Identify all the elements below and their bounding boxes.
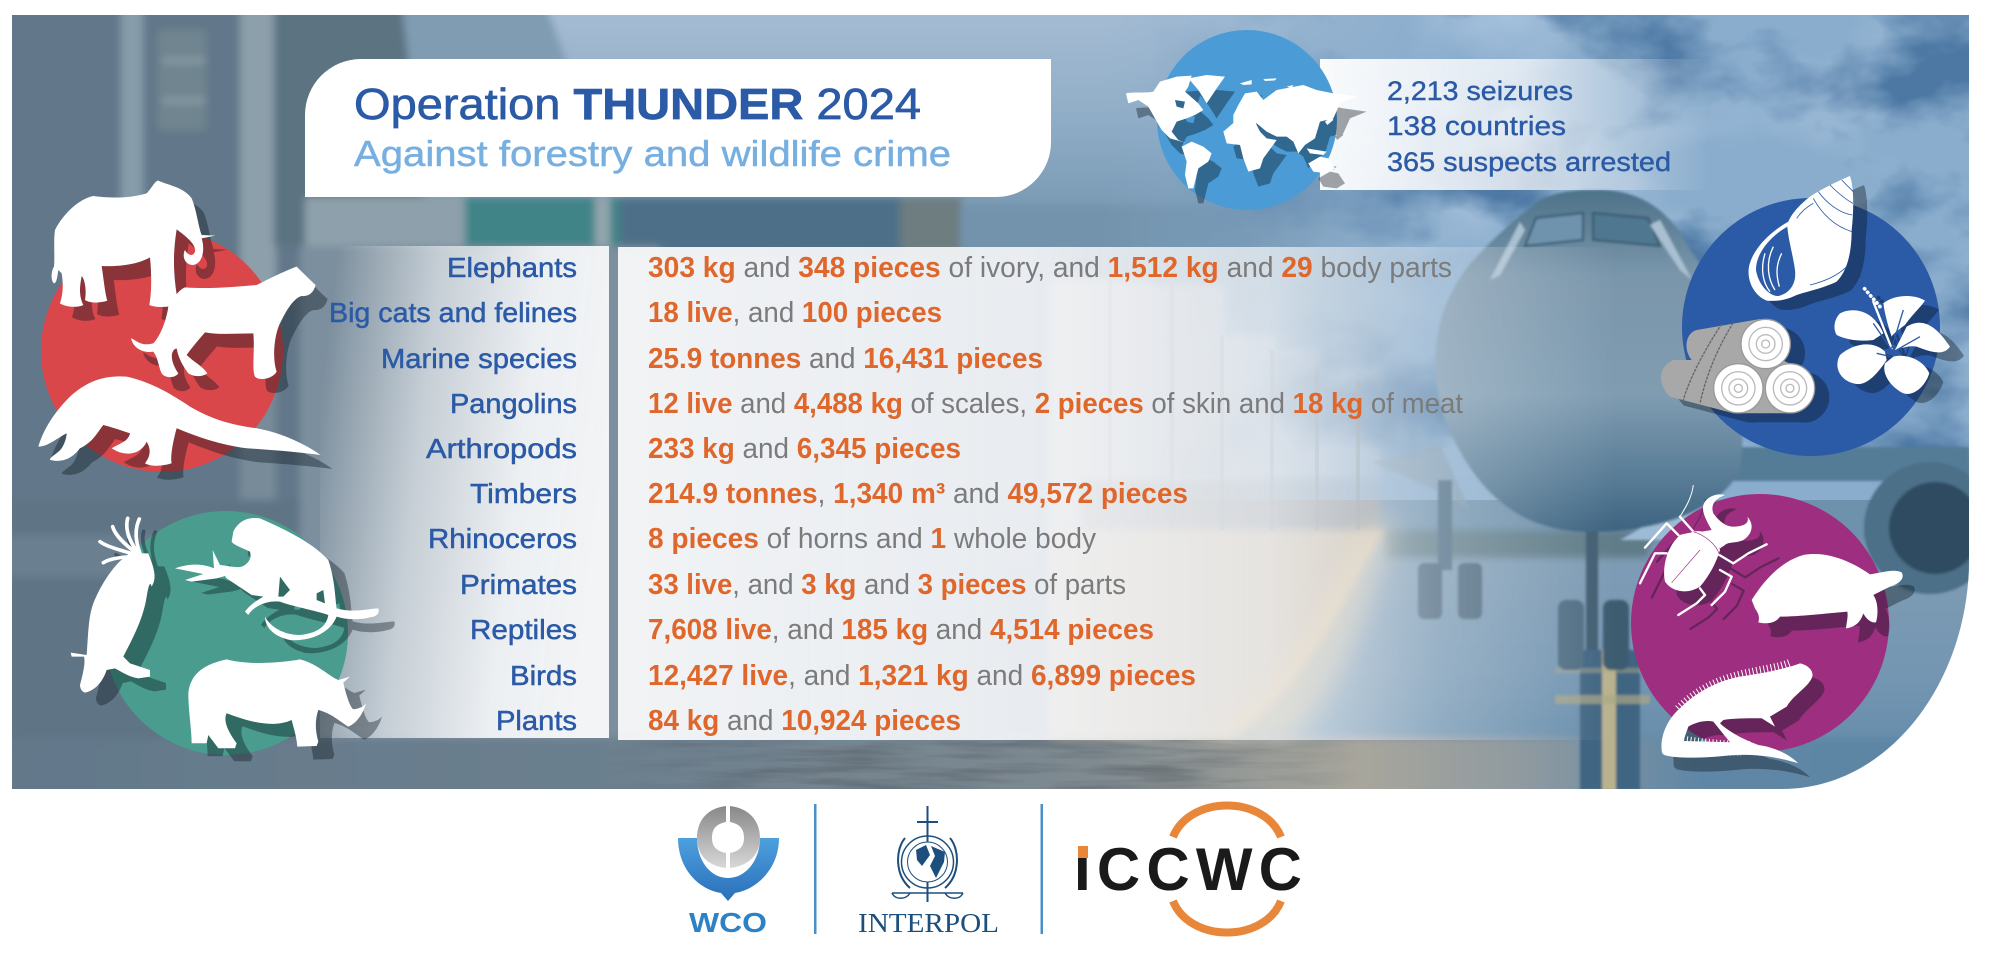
value: Primates: 33 live, and 3 kg and 3 pieces of parts bbox=[648, 569, 1126, 601]
value: Marine species: 25.9 tonnes and 16,431 pieces bbox=[648, 343, 1043, 375]
title heading: Operation THUNDER 2024 bbox=[354, 80, 921, 129]
red circle with elephant, big cat and pangolin bbox=[38, 181, 321, 472]
icon: turtle bbox=[1752, 554, 1903, 628]
subtitle: Against forestry and wildlife crime bbox=[354, 133, 951, 174]
icon: hibiscus flower bbox=[1834, 287, 1950, 394]
label: Arthropods: Arthropods bbox=[426, 433, 577, 464]
footer logos bbox=[678, 804, 1302, 938]
blue circle with shell, timber and plant bbox=[1661, 176, 1950, 456]
value: Plants: 84 kg and 10,924 pieces bbox=[648, 705, 961, 737]
logo: INTERPOL bbox=[858, 806, 999, 938]
icon: logs bbox=[1661, 319, 1815, 413]
value: Timbers: 214.9 tonnes, 1,340 m³ and 49,572 pieces bbox=[648, 478, 1188, 510]
countries stat: 138 countries bbox=[1387, 111, 1566, 141]
stats text bbox=[1387, 76, 1671, 177]
icon: beetle bbox=[1640, 485, 1767, 615]
logo: ICCWC bbox=[1074, 806, 1302, 932]
logo: INTERPOL: INTERPOL bbox=[858, 908, 999, 938]
value: Pangolins: 12 live and 4,488 kg of scales, 2 pieces of skin and 18 kg of meat bbox=[648, 388, 1463, 420]
label: Marine species: Marine species bbox=[381, 343, 577, 374]
value: Rhinoceros: 8 pieces of horns and 1 whole body bbox=[648, 523, 1096, 555]
logo: WCO bbox=[678, 806, 779, 938]
logo: ICCWC: ICCWC bbox=[1074, 836, 1302, 903]
value: Birds: 12,427 live, and 1,321 kg and 6,899 pieces bbox=[648, 660, 1196, 692]
icon: rhinoceros bbox=[188, 659, 366, 748]
panel: stats backdrop bbox=[1320, 59, 1710, 190]
label: Reptiles: Reptiles bbox=[470, 614, 577, 645]
value: Big cats: 18 live, and 100 pieces bbox=[648, 297, 942, 329]
value: Arthropods: 233 kg and 6,345 pieces bbox=[648, 433, 961, 465]
label: Birds: Birds bbox=[510, 660, 577, 691]
title panel bbox=[305, 59, 1051, 197]
label: Primates: Primates bbox=[460, 569, 577, 600]
icon: big cat bbox=[131, 267, 316, 379]
arrests stat: 365 suspects arrested bbox=[1387, 147, 1671, 177]
teal circle with cockatoo, primate and rhinoceros bbox=[71, 511, 379, 755]
label: Elephants: Elephants bbox=[447, 252, 577, 283]
light streak bbox=[1200, 520, 1395, 740]
divider two bbox=[1040, 804, 1043, 934]
label: Big cats and felines: Big cats and felines bbox=[329, 297, 577, 328]
panel: species labels bbox=[320, 246, 609, 738]
globe with world map bbox=[1126, 30, 1357, 210]
icon: cockatoo bbox=[71, 518, 155, 693]
value: Elephants: 303 kg and 348 pieces of ivory, and 1,512 kg and 29 body parts bbox=[648, 252, 1452, 284]
seizures stat: 2,213 seizures bbox=[1387, 76, 1573, 106]
panel: seizure values bbox=[618, 247, 1618, 740]
icon: elephant bbox=[52, 181, 215, 307]
logo: WCO: WCO bbox=[689, 907, 767, 938]
label: Timbers: Timbers bbox=[470, 478, 577, 509]
divider one bbox=[814, 804, 816, 934]
label: Pangolins: Pangolins bbox=[450, 388, 577, 419]
world map bbox=[1126, 75, 1357, 188]
species names bbox=[329, 252, 577, 736]
value: Reptiles: 7,608 live, and 185 kg and 4,514 pieces bbox=[648, 614, 1154, 646]
label: Plants: Plants bbox=[496, 705, 577, 736]
icon: pangolin bbox=[38, 376, 321, 466]
icon: iguana bbox=[1661, 663, 1813, 763]
icon: shell bbox=[1749, 176, 1853, 301]
icon: primate with branch bbox=[175, 518, 379, 640]
seizure values bbox=[648, 252, 1463, 737]
label: Rhinoceros: Rhinoceros bbox=[428, 523, 577, 554]
purple circle with beetle, turtle and iguana bbox=[1631, 485, 1903, 763]
